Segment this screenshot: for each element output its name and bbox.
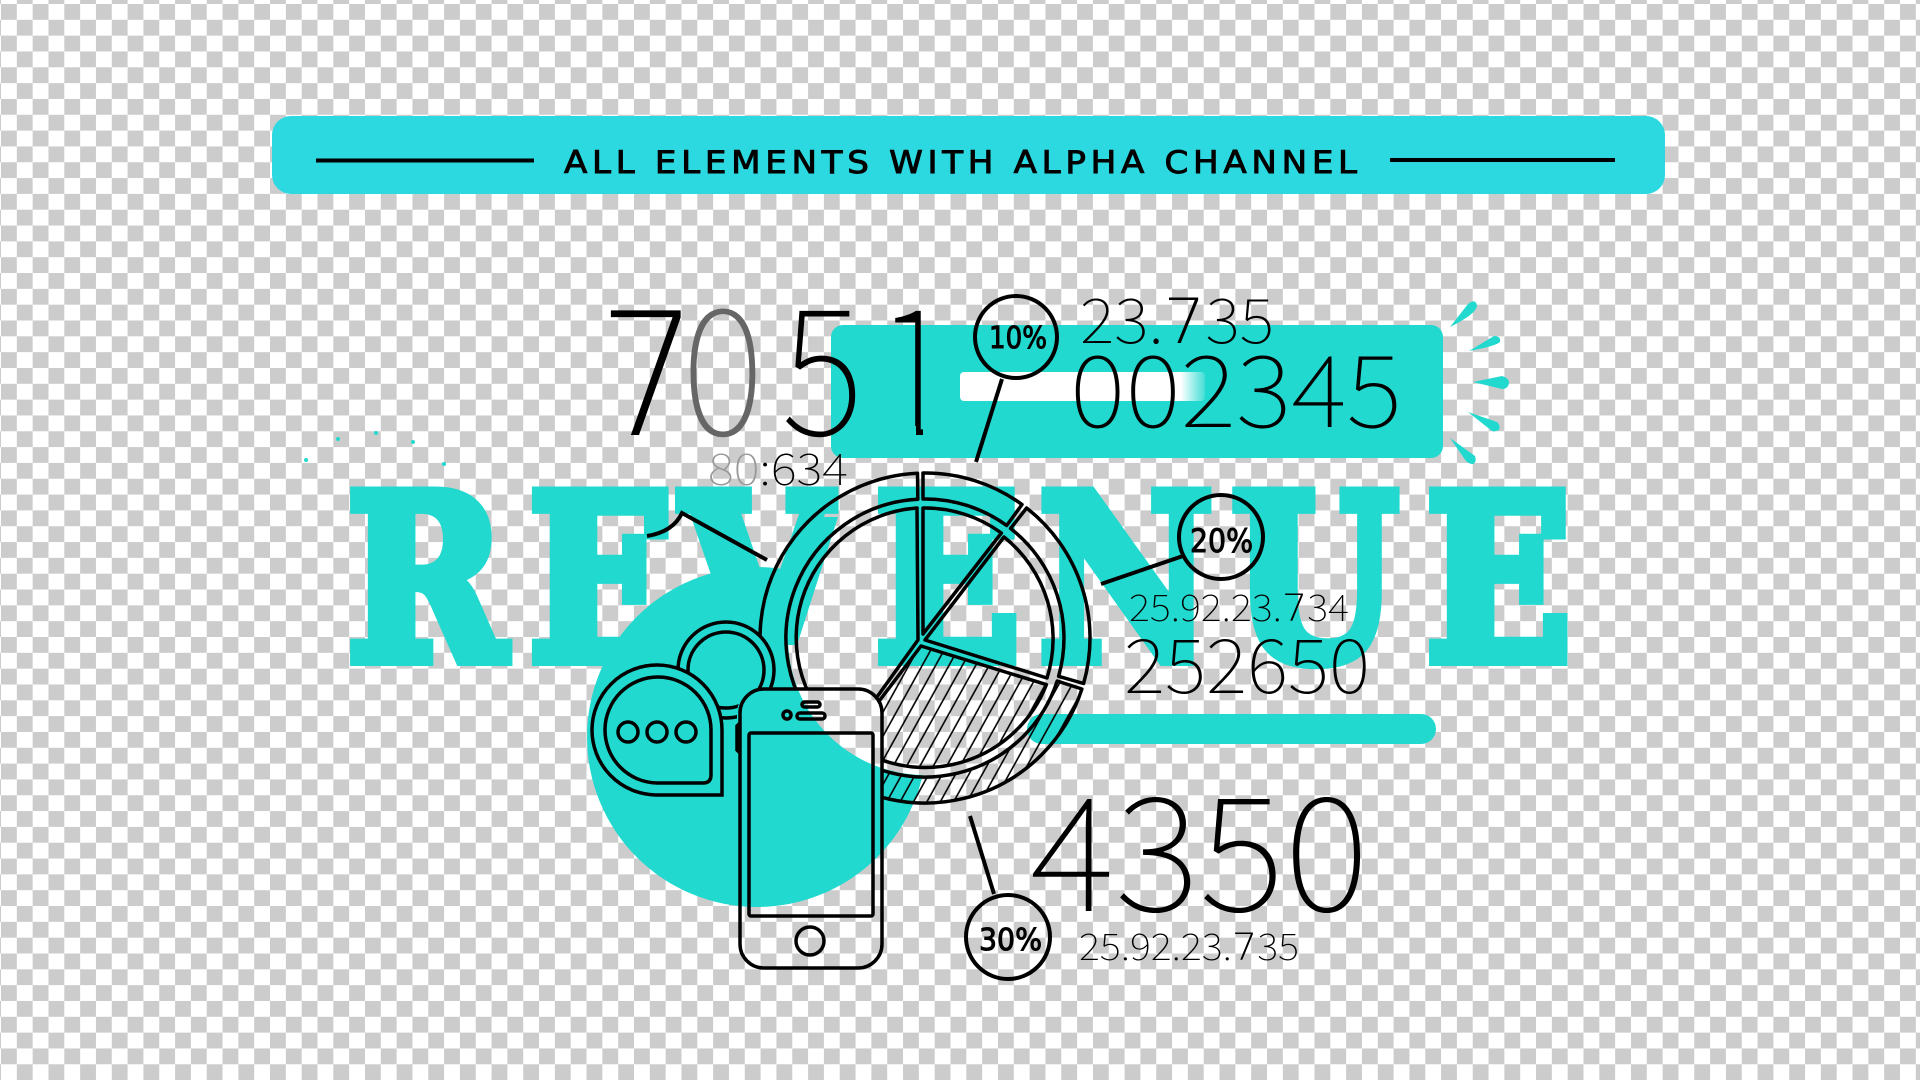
icon: smartphone <box>737 689 882 968</box>
headline REVENUE: REVENUE <box>347 447 1571 713</box>
number 25.92.23.735: 25.92.23. 735 <box>1079 917 1299 971</box>
outer ring segment right <box>1011 508 1090 684</box>
inner slice top <box>923 508 1001 634</box>
teal number panel <box>831 325 1443 458</box>
callout 20%: 20% <box>1190 522 1253 560</box>
banner title: ALL ELEMENTS WITH ALPHA CHANNEL <box>564 144 1357 181</box>
callout 30% <box>966 816 1050 979</box>
number 4350: 4350 <box>1030 727 1369 957</box>
number 002345: 002345 <box>1070 311 1402 456</box>
outer ring segment top <box>923 473 1022 526</box>
top banner <box>272 116 1665 194</box>
white bar in panel <box>960 372 1205 401</box>
callout 30%: 30% <box>979 923 1042 958</box>
burst spikes <box>1450 301 1509 464</box>
pie chart <box>760 473 1090 803</box>
inner slice right <box>925 537 1053 678</box>
callout 20% <box>1101 495 1263 584</box>
inner slice left <box>794 506 920 698</box>
number 252650: 252650 <box>1124 606 1370 715</box>
callout line for 80:634 <box>647 513 767 560</box>
banner left rule <box>316 158 534 162</box>
right arm of the letter V <box>760 517 838 645</box>
inner slice hatched <box>879 644 1048 770</box>
number 25.92.23.734: 25.92.23. 734 <box>1129 578 1349 632</box>
icon: chat bubble <box>592 665 722 795</box>
blob circle, cut out by the pie <box>587 567 927 907</box>
number 7051: 7051 <box>598 237 956 485</box>
banner background <box>272 116 1665 194</box>
teal underline bar <box>1027 714 1436 744</box>
scattered teal dots <box>304 431 446 466</box>
outer ring segment hatched <box>884 679 1084 805</box>
number 80:634: 80:634 <box>708 434 848 498</box>
outer ring segment left <box>758 472 920 688</box>
banner right rule <box>1390 158 1615 162</box>
number 23.735: 23.735 <box>1080 271 1274 361</box>
callout 10% <box>975 296 1057 462</box>
callout 10%: 10% <box>989 321 1047 356</box>
ring behind bubble <box>678 622 774 718</box>
